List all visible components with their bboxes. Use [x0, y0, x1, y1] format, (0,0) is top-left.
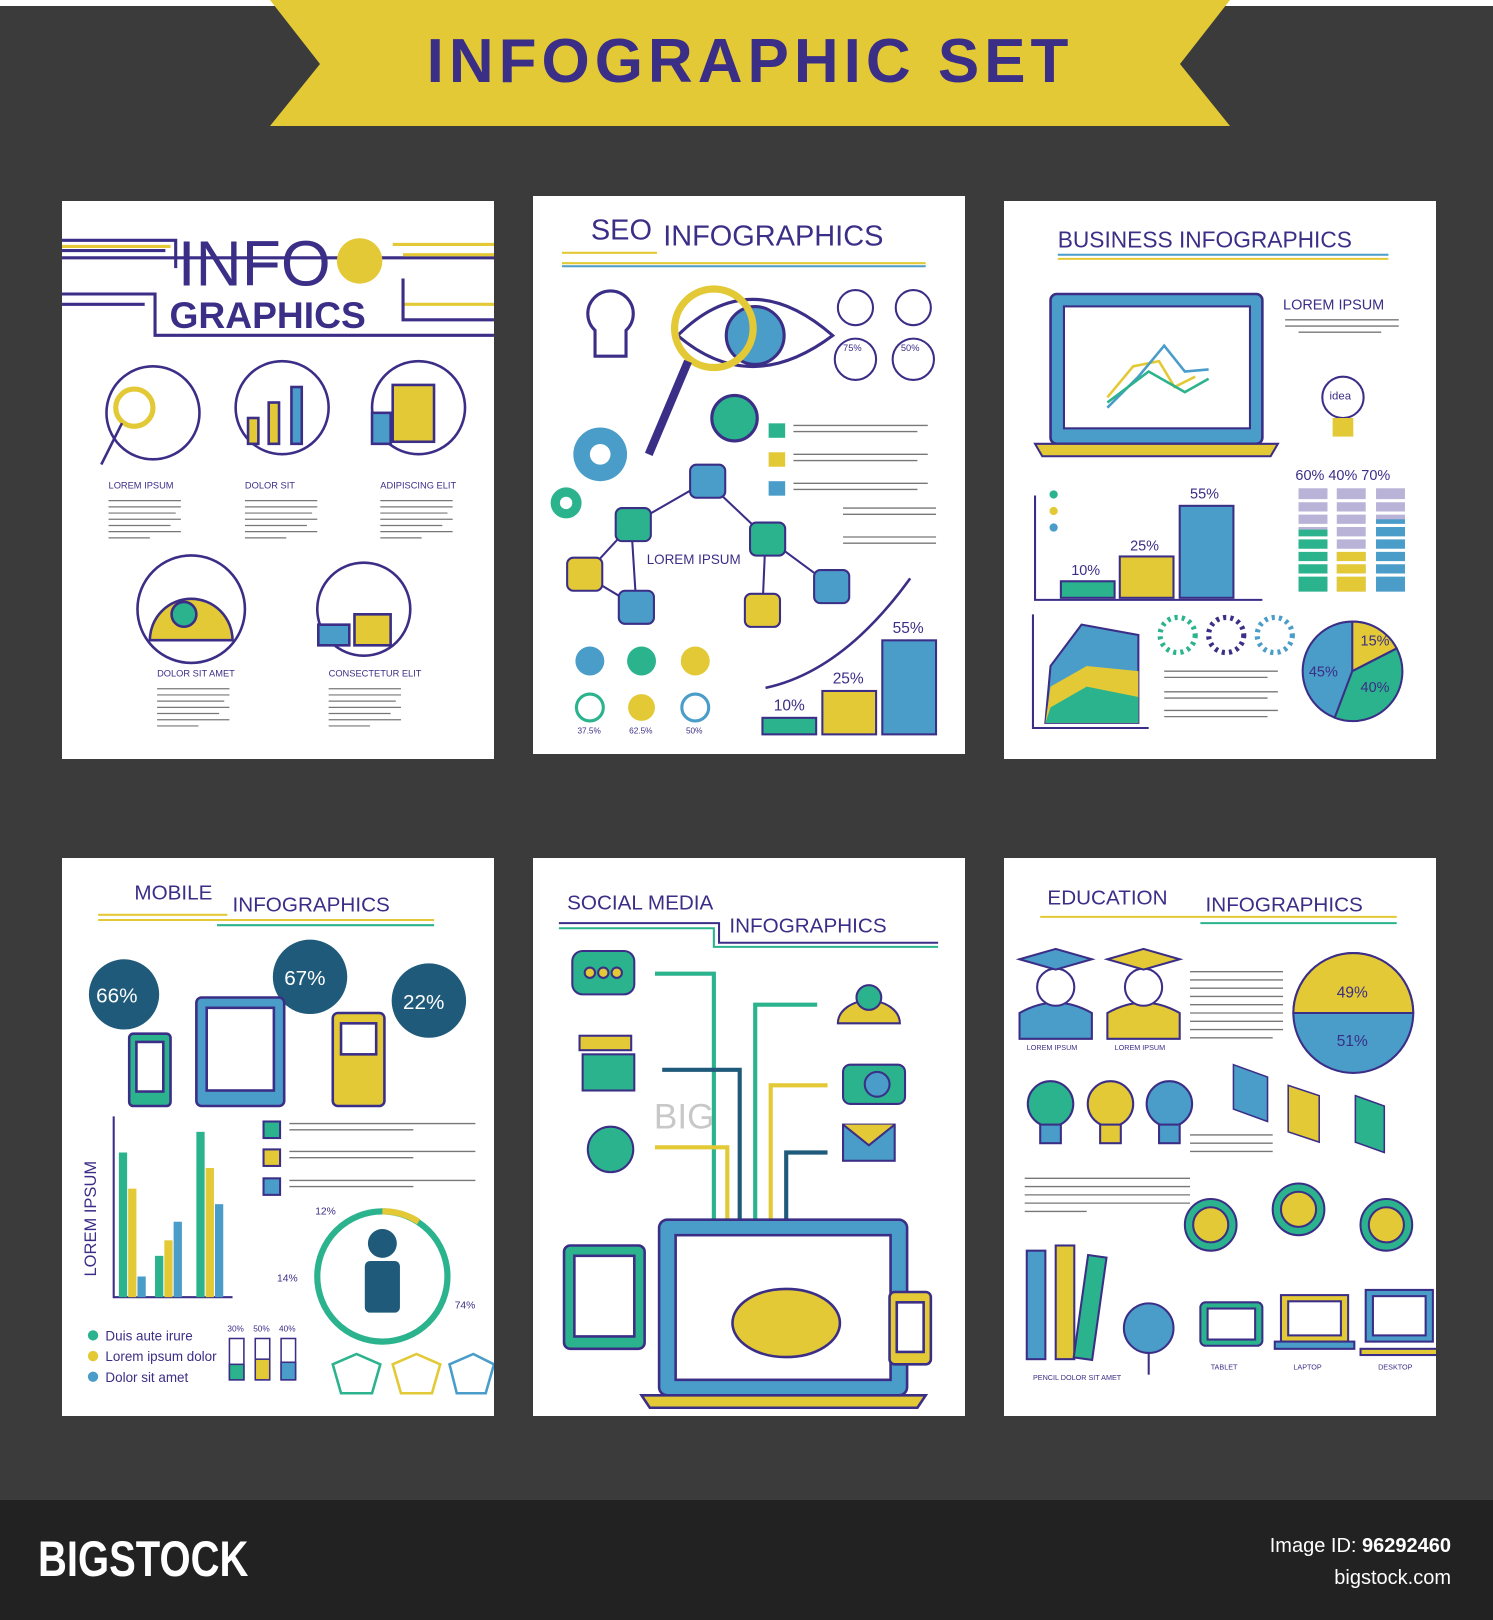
heading: MOBILE [134, 881, 212, 904]
starbursts: 22% [403, 991, 444, 1014]
text blocks: ADIPISCING ELIT [380, 480, 456, 490]
text blocks: DOLOR SIT AMET [157, 668, 235, 678]
pie chart: 15% [1361, 633, 1390, 649]
devices with brain [564, 1220, 931, 1408]
icons left [572, 951, 634, 1172]
heading [1040, 886, 1397, 923]
legend squares [264, 1122, 280, 1195]
top white strip [0, 0, 1493, 6]
footer image id [1270, 1535, 1451, 1589]
heading: SOCIAL MEDIA [567, 892, 714, 915]
person ring [277, 1206, 475, 1342]
icons right [838, 985, 905, 1161]
network [567, 465, 849, 627]
heading: EDUCATION [1047, 887, 1168, 910]
pins: 50% [901, 343, 919, 353]
panel: mobile infographics [62, 858, 494, 1416]
text BIG: BIG [654, 1098, 714, 1137]
lorem ipsum + idea bulb: LOREM IPSUM [1283, 298, 1384, 314]
small circle charts: 50% [686, 726, 703, 735]
chart: rising bars: 25% [833, 671, 864, 688]
bar chart [1035, 487, 1262, 600]
panel: education infographics: PENCIL DOLOR SIT AMET [1033, 1373, 1122, 1382]
bar chart: 55% [1190, 487, 1219, 503]
legend list: Lorem ipsum dolor [105, 1349, 217, 1364]
icons: people [137, 555, 410, 663]
lorem ipsum + idea bulb: idea [1330, 390, 1352, 402]
heading: INFOGRAPHICS [663, 221, 883, 253]
bar chart: lorem ipsum: LOREM IPSUM [81, 1161, 100, 1276]
pie 49/51: 49% [1337, 985, 1368, 1002]
pie 49/51 [1293, 953, 1413, 1073]
batteries: 50% [253, 1324, 270, 1333]
panel: SEO infographics: LOREM IPSUM [647, 552, 741, 567]
text blocks: LOREM IPSUM [109, 480, 174, 490]
panel: info graphics [62, 201, 494, 759]
heading [559, 892, 938, 947]
icons: three circles [101, 361, 465, 464]
small circle charts: 37.5% [577, 726, 602, 735]
heading: info graphics [62, 228, 494, 336]
pie chart: 40% [1361, 680, 1390, 696]
icon: gears [551, 427, 627, 518]
heading [562, 214, 926, 266]
tablet laptop desktop [1200, 1290, 1438, 1355]
title banner [270, 0, 1230, 126]
arrows network [655, 974, 828, 1261]
panel: education infographics [1004, 858, 1436, 1416]
pencils [1027, 1246, 1107, 1360]
clocks [1185, 1184, 1412, 1251]
starbursts: 67% [284, 967, 326, 990]
batteries [227, 1324, 296, 1380]
small circle charts: 62.5% [629, 726, 653, 735]
pie 49/51: 51% [1337, 1033, 1368, 1050]
starbursts [89, 940, 466, 1038]
dotted rings [1160, 617, 1292, 653]
bar chart: 25% [1130, 538, 1159, 554]
bulbs [1028, 1081, 1192, 1143]
pins [835, 290, 934, 380]
pentagons [333, 1354, 494, 1393]
icon: magnifier eye [588, 289, 833, 454]
footer logo: BIGSTOCK [38, 1531, 248, 1587]
panel: social media infographics [533, 858, 965, 1416]
pie chart [1303, 622, 1402, 721]
footer image id: bigstock.com [1334, 1567, 1451, 1589]
legend list: Dolor sit amet [105, 1370, 188, 1385]
panel: SEO infographics [533, 196, 965, 754]
bar chart: 10% [1071, 563, 1100, 579]
heading: INFOGRAPHICS [233, 894, 390, 917]
heading: INFOGRAPHICS [1206, 894, 1363, 917]
panel: education infographics: LOREM IPSUM [1027, 1043, 1077, 1052]
heading: INFOGRAPHICS [729, 914, 887, 937]
laptop chart [1035, 294, 1278, 456]
text blocks: DOLOR SIT [245, 480, 295, 490]
area chart [1033, 614, 1149, 728]
starbursts: 66% [96, 985, 137, 1008]
legend list [769, 423, 936, 543]
graduates [1020, 949, 1180, 1039]
lorem ipsum + idea bulb [1283, 298, 1399, 437]
panel: education infographics: LAPTOP [1293, 1362, 1322, 1372]
text blocks [109, 480, 456, 678]
heading: BUSINESS INFOGRAPHICS [1058, 227, 1352, 253]
text blocks: CONSECTETUR ELIT [329, 668, 422, 678]
legend list: Duis aute irure [105, 1329, 193, 1344]
batteries: 40% [279, 1324, 296, 1333]
batteries: 30% [227, 1324, 245, 1333]
person ring: 12% [315, 1207, 336, 1218]
person ring: 14% [277, 1274, 298, 1285]
heading: SEO [591, 214, 652, 246]
devices [129, 998, 384, 1106]
stacked column bars [1295, 468, 1405, 592]
panel: education infographics: DESKTOP [1378, 1362, 1413, 1372]
panel: education infographics: TABLET [1211, 1362, 1238, 1372]
title banner: INFOGRAPHIC SET [427, 27, 1073, 96]
pie chart: 45% [1309, 664, 1338, 680]
footer bar [0, 1500, 1493, 1620]
chart: rising bars: 55% [893, 620, 924, 637]
panel: business infographics [1004, 201, 1436, 759]
chart: rising bars: 10% [774, 698, 805, 715]
legend list [88, 1329, 217, 1385]
chart: rising bars [762, 578, 936, 734]
heading: info graphics: GRAPHICS [170, 294, 366, 336]
pins: 75% [843, 343, 862, 353]
panel: education infographics: LOREM IPSUM [1115, 1043, 1165, 1052]
small circle charts [575, 647, 710, 735]
globe [1124, 1303, 1174, 1375]
stacked column bars: 60% 40% 70% [1295, 468, 1390, 484]
heading: info graphics: INFO [178, 228, 331, 300]
person ring: 74% [455, 1301, 475, 1312]
bar chart: lorem ipsum [81, 1116, 233, 1297]
footer image id: Image ID: 96292460 [1270, 1535, 1451, 1557]
heading [98, 881, 434, 925]
books [1233, 1065, 1384, 1152]
